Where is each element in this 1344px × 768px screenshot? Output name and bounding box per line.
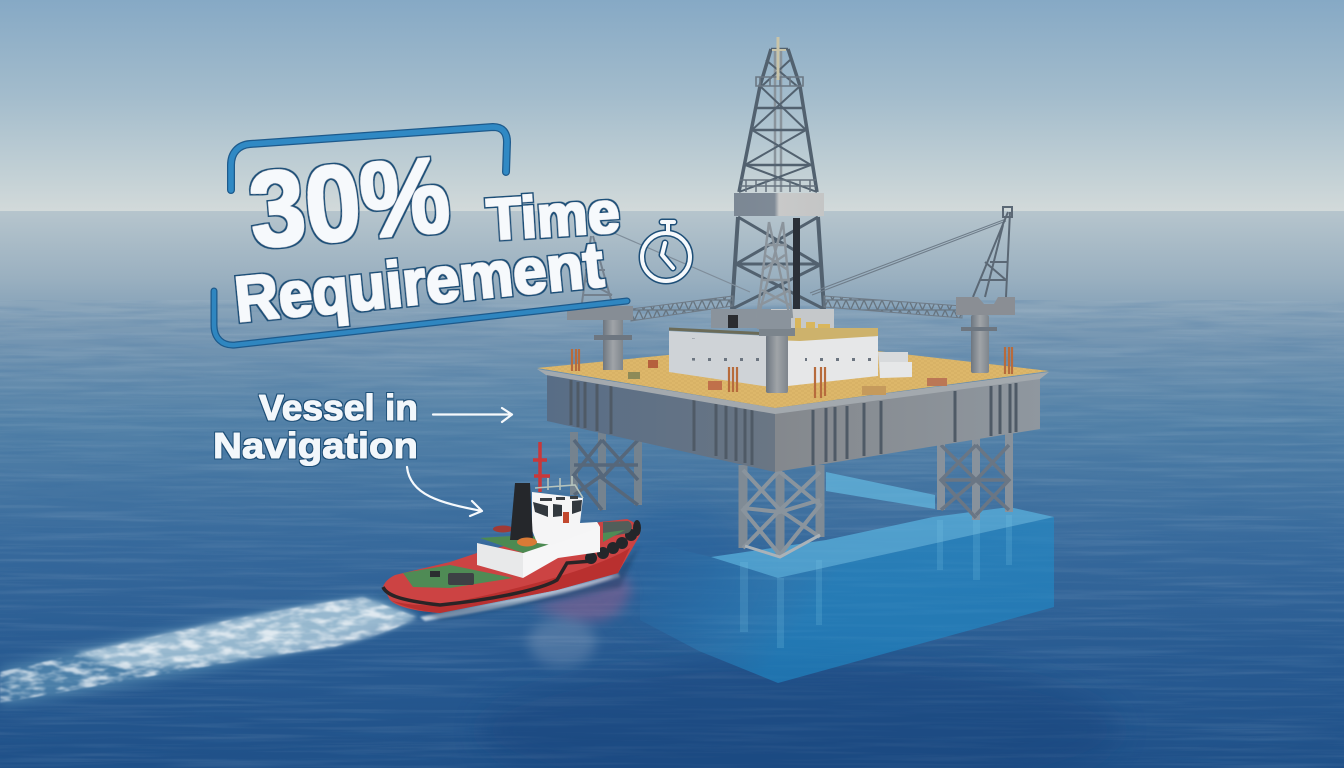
sky background	[0, 0, 1344, 213]
hull stiffeners	[571, 380, 1016, 465]
heading: 30%: 30%	[244, 133, 454, 271]
red mast	[533, 442, 550, 492]
footprint lower volume	[640, 517, 1054, 683]
right crane boom	[824, 296, 962, 318]
left crane cab	[567, 306, 633, 320]
icon: stopwatch	[642, 222, 690, 281]
superstructure roof	[480, 536, 553, 553]
life raft	[517, 538, 537, 546]
dinghy	[493, 526, 513, 532]
hull right face	[775, 378, 1040, 472]
deck rim	[537, 369, 1049, 414]
offshore platform	[537, 37, 1049, 557]
right crane pedestal	[971, 315, 989, 373]
left crane tower	[581, 236, 614, 310]
lower lattice	[732, 217, 824, 309]
arrow: to vessel	[407, 467, 482, 516]
right crane cab	[956, 297, 1015, 315]
building left wing	[669, 331, 770, 387]
bracket top	[231, 127, 507, 190]
heading: Requirement: Requirement	[231, 228, 607, 336]
superstructure lower: aft wall	[477, 543, 523, 578]
deck machinery	[448, 573, 474, 585]
label text: Vessel in: Vessel in	[259, 387, 418, 428]
label text: Navigation: Navigation	[213, 425, 418, 466]
footprint front strip	[711, 507, 1054, 578]
bow tyres	[585, 520, 641, 564]
left crane	[567, 233, 750, 370]
tugboat vessel	[375, 442, 641, 620]
left crane boom	[631, 296, 733, 321]
upper deckhouse	[711, 309, 834, 328]
blue projected footprint under platform	[640, 472, 1054, 683]
main title callout	[214, 127, 627, 345]
derrick mid box	[734, 193, 824, 216]
footprint leg reflections	[740, 515, 1012, 648]
left crane pedestal	[603, 320, 623, 370]
derrick tower	[732, 37, 824, 309]
fender line	[383, 561, 592, 605]
deck equipment and orange pipes	[572, 347, 1012, 398]
derrick dark pipe	[793, 218, 800, 314]
bow bulwark	[603, 521, 632, 538]
boat wake	[0, 573, 620, 706]
front truss leg	[743, 465, 820, 557]
right crane tower	[973, 207, 1012, 297]
deck	[537, 342, 1049, 408]
back-left truss leg	[574, 432, 638, 510]
left crane wire	[614, 233, 750, 292]
hull left face	[547, 375, 775, 472]
central crane mast	[757, 222, 792, 318]
building right wing	[770, 336, 878, 388]
funnel	[510, 483, 533, 540]
back-right truss leg	[941, 432, 1009, 520]
railings on top	[535, 476, 583, 498]
aft deck	[403, 565, 513, 588]
vessel label	[213, 387, 418, 466]
hull	[383, 519, 640, 613]
right crane wire	[810, 219, 1006, 295]
reflection of vessel in water	[528, 572, 632, 666]
equipment on roof	[795, 318, 830, 332]
bracket bottom	[214, 291, 627, 345]
footprint back strip	[826, 472, 935, 509]
heading: Time: Time	[485, 180, 622, 253]
waterline shadow	[375, 545, 640, 620]
ocean background	[0, 211, 1344, 768]
arrow: to platform	[433, 408, 512, 422]
upper cabin	[532, 492, 600, 545]
upper lattice	[739, 49, 817, 192]
central crane pedestal	[766, 335, 788, 393]
right crane	[810, 207, 1015, 373]
superstructure lower: side wall	[523, 522, 600, 578]
small annex block	[878, 352, 908, 378]
accommodation building	[669, 222, 912, 393]
